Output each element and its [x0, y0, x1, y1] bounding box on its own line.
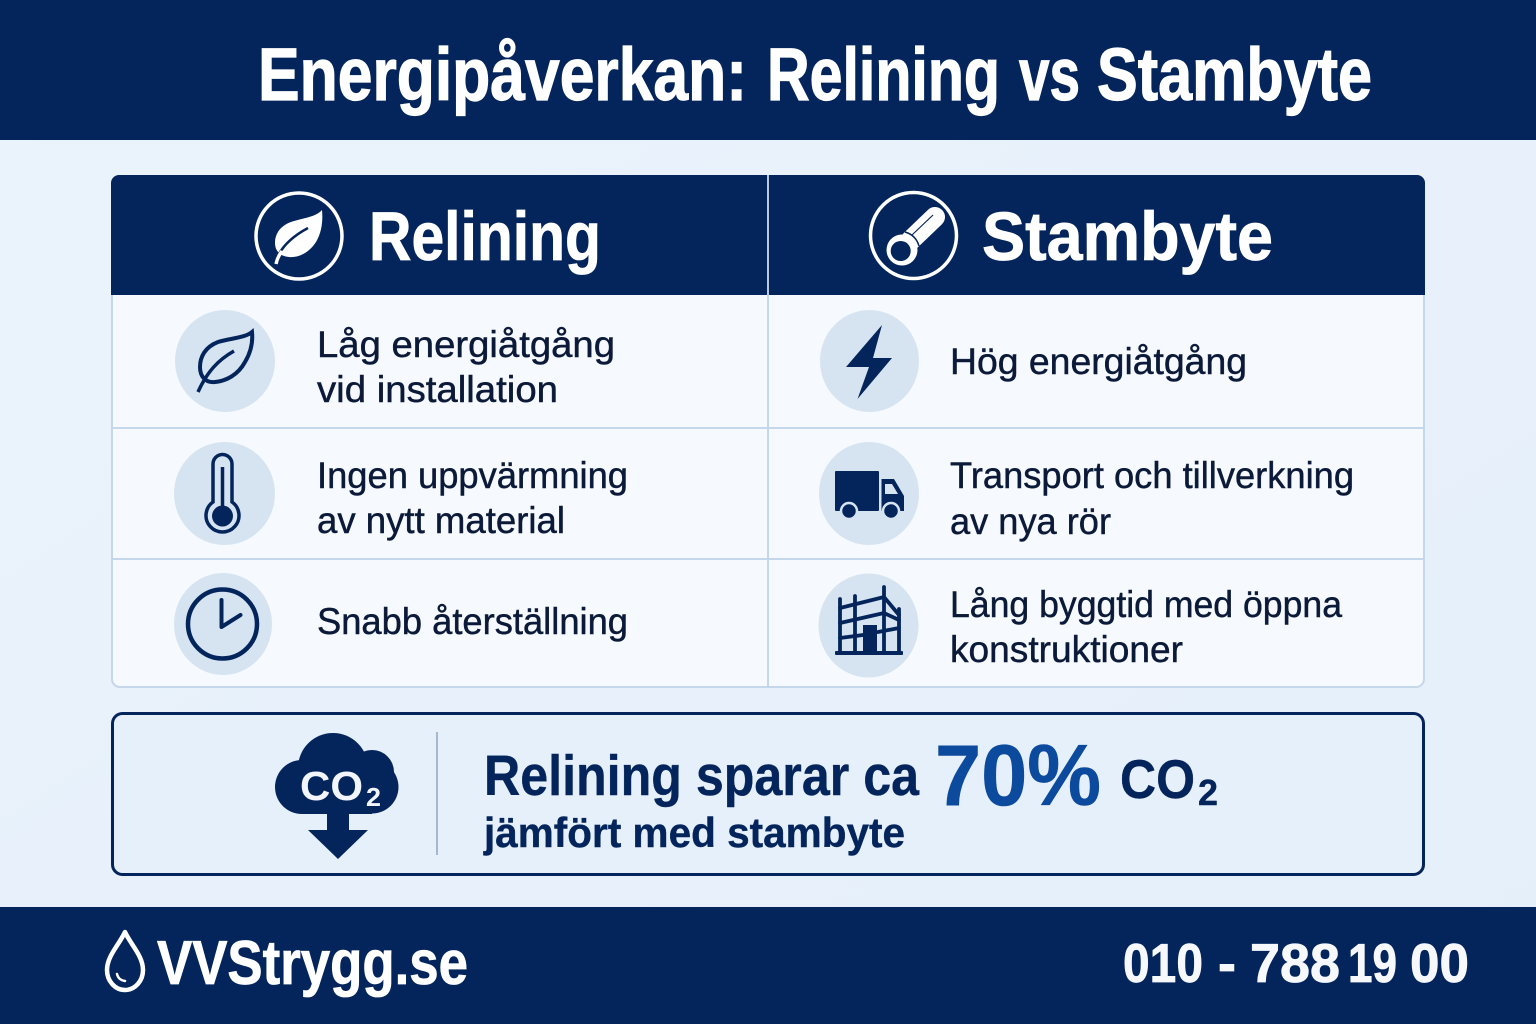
text: konstruktioner — [950, 629, 1183, 670]
heading text: Relining — [369, 198, 601, 275]
icon: leaf in ring — [256, 193, 342, 279]
figure: 70%: 70% — [935, 728, 1101, 824]
text: vid installation — [317, 369, 558, 410]
text: Snabb återställning — [317, 601, 628, 642]
text: Hög energiåtgång — [950, 341, 1247, 382]
icon: clock — [174, 573, 272, 675]
row: Hög energiåtgång — [820, 310, 1247, 412]
icon: CO2 cloud with down arrow: 2 — [366, 782, 381, 812]
icon: CO2 cloud with down arrow — [275, 733, 398, 859]
CO2 label: CO — [1120, 748, 1195, 810]
icon: pipe in ring — [870, 192, 956, 278]
phone number: 788 — [1250, 932, 1340, 994]
icon: leaf outline — [175, 310, 275, 412]
phone number: 00 — [1410, 932, 1469, 994]
comparison table — [111, 175, 1425, 687]
row: Ingen uppvärmning — [174, 442, 628, 545]
icon: scaffolding — [818, 574, 918, 678]
text: av nya rör — [950, 501, 1111, 542]
headline: Relining sparar ca — [484, 744, 920, 808]
row: Transport och tillverkning — [819, 442, 1354, 545]
title: Relining — [767, 33, 1000, 116]
CO2 label: 2 — [1198, 772, 1218, 813]
text: Låg energiåtgång — [317, 324, 615, 365]
brand: VVStrygg.se — [157, 929, 468, 998]
text: Lång byggtid med öppna — [950, 584, 1342, 625]
footer bar — [0, 907, 1536, 1024]
title: Energipåverkan: — [258, 33, 747, 116]
icon: thermometer — [174, 442, 275, 545]
text: Transport och tillverkning — [950, 455, 1354, 496]
title banner — [0, 0, 1536, 140]
title: vs — [1019, 33, 1080, 116]
heading text: Stambyte — [982, 198, 1273, 275]
icon: water drop — [107, 932, 143, 990]
row: Snabb återställning — [174, 573, 628, 675]
phone number: 19 — [1348, 932, 1397, 994]
phone number: 010 — [1123, 932, 1203, 994]
column heading: Relining — [256, 193, 601, 279]
text: av nytt material — [317, 500, 565, 541]
row: Låg energiåtgång — [175, 310, 615, 412]
icon: truck — [819, 442, 919, 545]
icon: lightning bolt — [820, 310, 919, 412]
row: Lång byggtid — [818, 574, 1342, 678]
column heading: Stambyte — [870, 192, 1273, 278]
phone number: - — [1218, 932, 1236, 994]
callout: CO2 savings — [112, 714, 1424, 874]
subline: jämfört med stambyte — [483, 809, 905, 856]
title: Stambyte — [1097, 33, 1372, 116]
icon: CO2 cloud with down arrow: CO — [300, 763, 363, 809]
text: Ingen uppvärmning — [317, 455, 628, 496]
